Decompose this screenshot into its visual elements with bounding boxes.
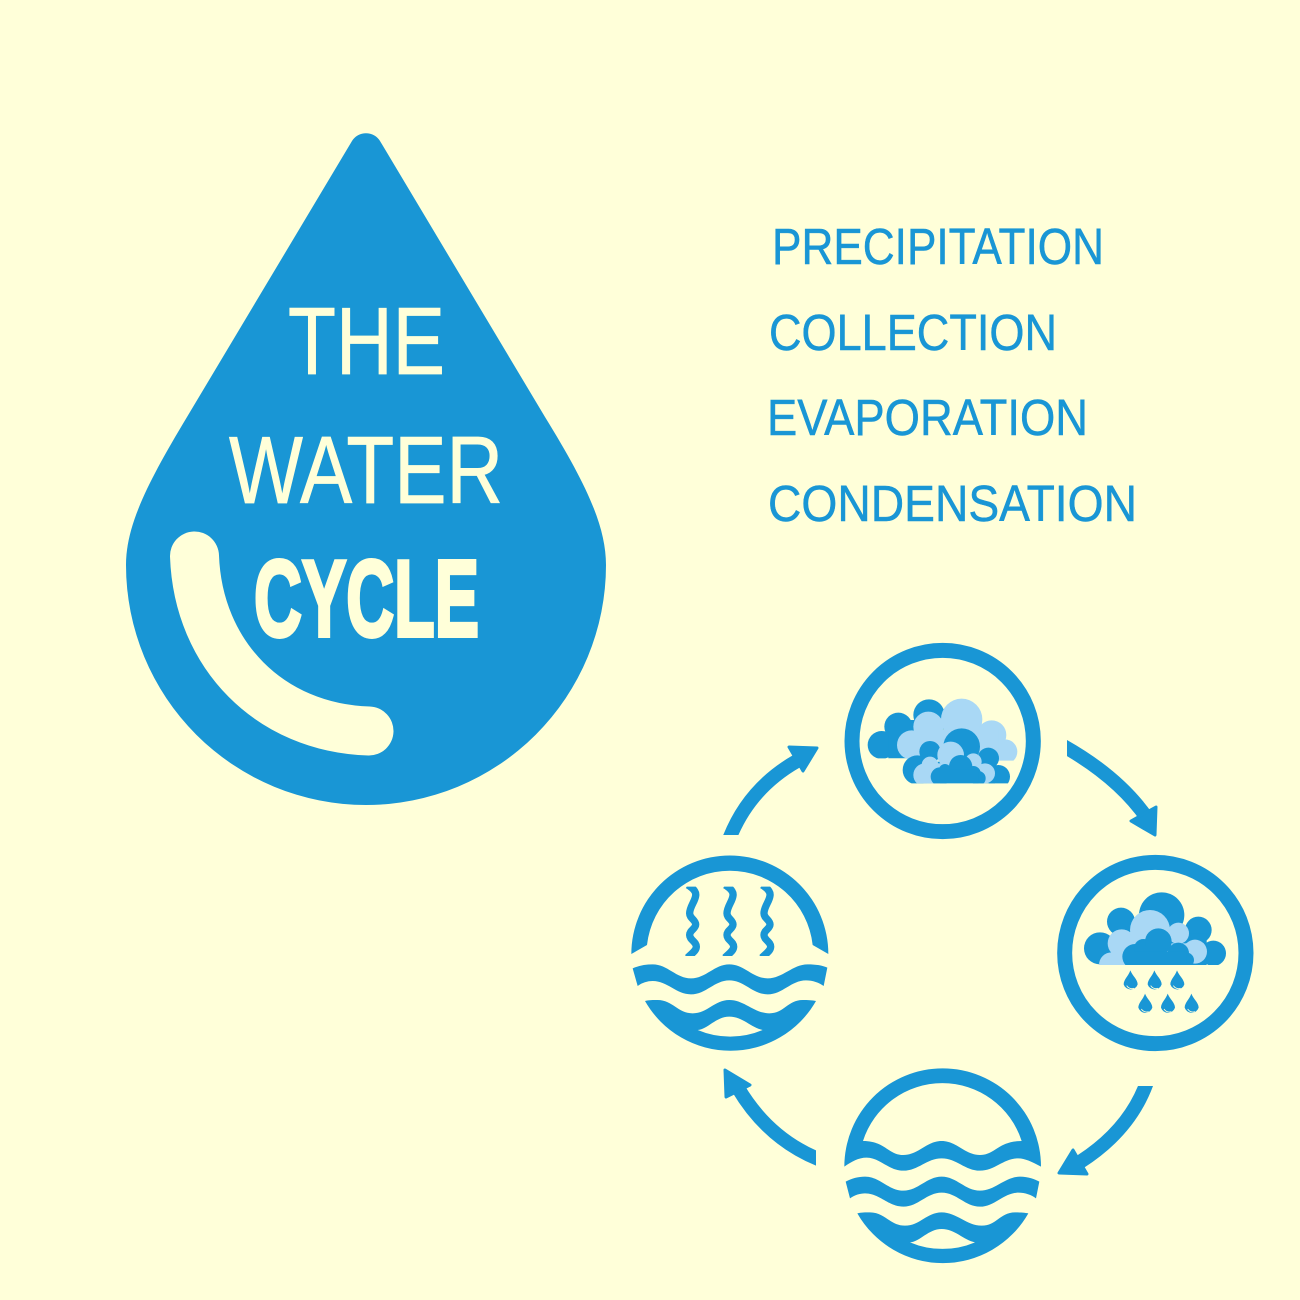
rain drops — [1124, 970, 1199, 1013]
drop highlight swoosh — [194, 556, 369, 731]
arrow: precipitation to collection — [1059, 1076, 1149, 1174]
label: precipitation: PRECIPITATION — [772, 218, 1104, 275]
stage names list — [767, 218, 1137, 532]
panel: water drop title — [126, 133, 606, 805]
waves and water bowl — [633, 964, 827, 1051]
icon: condensation clouds — [852, 650, 1033, 832]
arrow: evaporation to condensation — [727, 747, 817, 845]
icon: evaporation steam over water — [631, 856, 828, 1051]
label: evaporation: EVAPORATION — [767, 389, 1088, 446]
arrow: collection to evaporation — [725, 1070, 826, 1162]
title: WATER: WATER — [229, 417, 503, 524]
icon: collection water waves — [844, 1068, 1041, 1263]
cycle diagram — [631, 650, 1246, 1263]
icon: precipitation rain cloud — [1065, 862, 1246, 1044]
label: collection: COLLECTION — [769, 304, 1057, 361]
title: THE: THE — [288, 288, 445, 395]
arrow: condensation to precipitation — [1058, 743, 1156, 835]
steam lines — [688, 885, 771, 958]
water drop shape — [126, 133, 606, 805]
label: condensation: CONDENSATION — [768, 475, 1137, 532]
title: CYCLE: CYCLE — [254, 538, 479, 660]
